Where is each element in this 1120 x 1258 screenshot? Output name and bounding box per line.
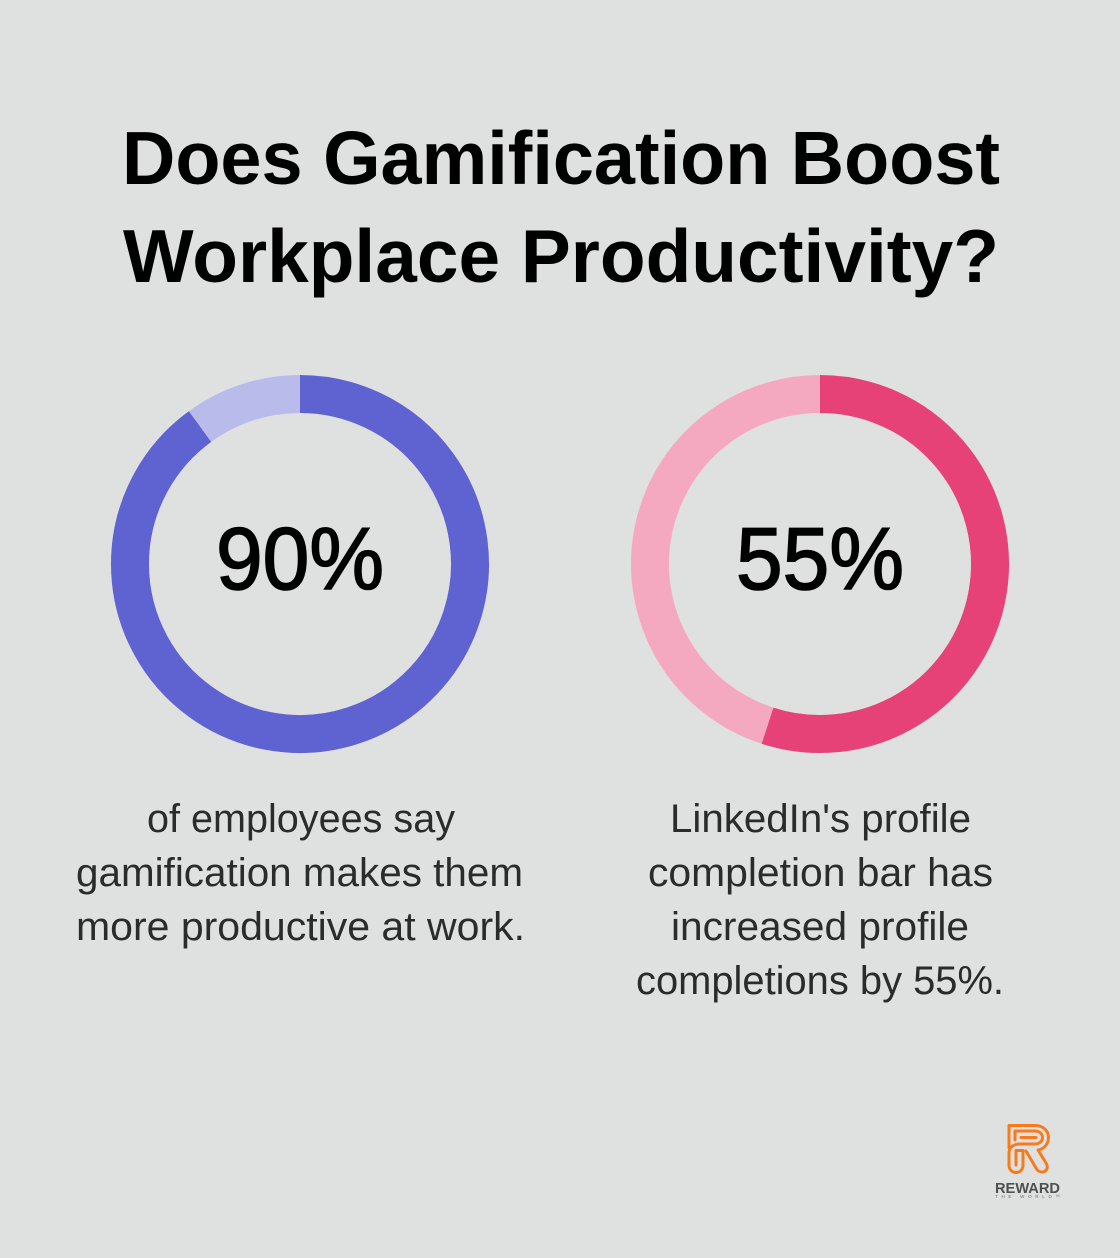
title: Workplace Productivity? bbox=[123, 214, 999, 298]
description: LinkedIn: increased profile bbox=[671, 905, 969, 949]
description: employees: of employees say bbox=[147, 797, 455, 841]
description: LinkedIn: LinkedIn's profile bbox=[670, 797, 971, 841]
description: employees: more productive at work. bbox=[76, 905, 525, 949]
icon: R mark bbox=[1009, 1126, 1048, 1172]
value: 90%: 90% bbox=[216, 509, 384, 608]
title bbox=[122, 116, 1000, 298]
description: employees: gamification makes them bbox=[76, 851, 523, 895]
description: LinkedIn bbox=[636, 797, 1004, 1003]
value: 55%: 55% bbox=[736, 509, 904, 608]
description: LinkedIn: completion bar has bbox=[648, 851, 993, 895]
panel: 90% stat bbox=[76, 394, 525, 949]
panel: 55% stat bbox=[636, 394, 1004, 1003]
donut chart: 90% bbox=[130, 394, 470, 734]
description: LinkedIn: completions by 55%. bbox=[636, 959, 1004, 1003]
tagline: THE WORLD™ bbox=[995, 1194, 1060, 1199]
donut chart: 55% bbox=[650, 394, 990, 734]
title: Does Gamification Boost bbox=[122, 116, 1000, 200]
wordmark: REWARD bbox=[995, 1180, 1060, 1197]
description: employees bbox=[76, 797, 525, 949]
logo: Reward the World bbox=[995, 1126, 1060, 1199]
